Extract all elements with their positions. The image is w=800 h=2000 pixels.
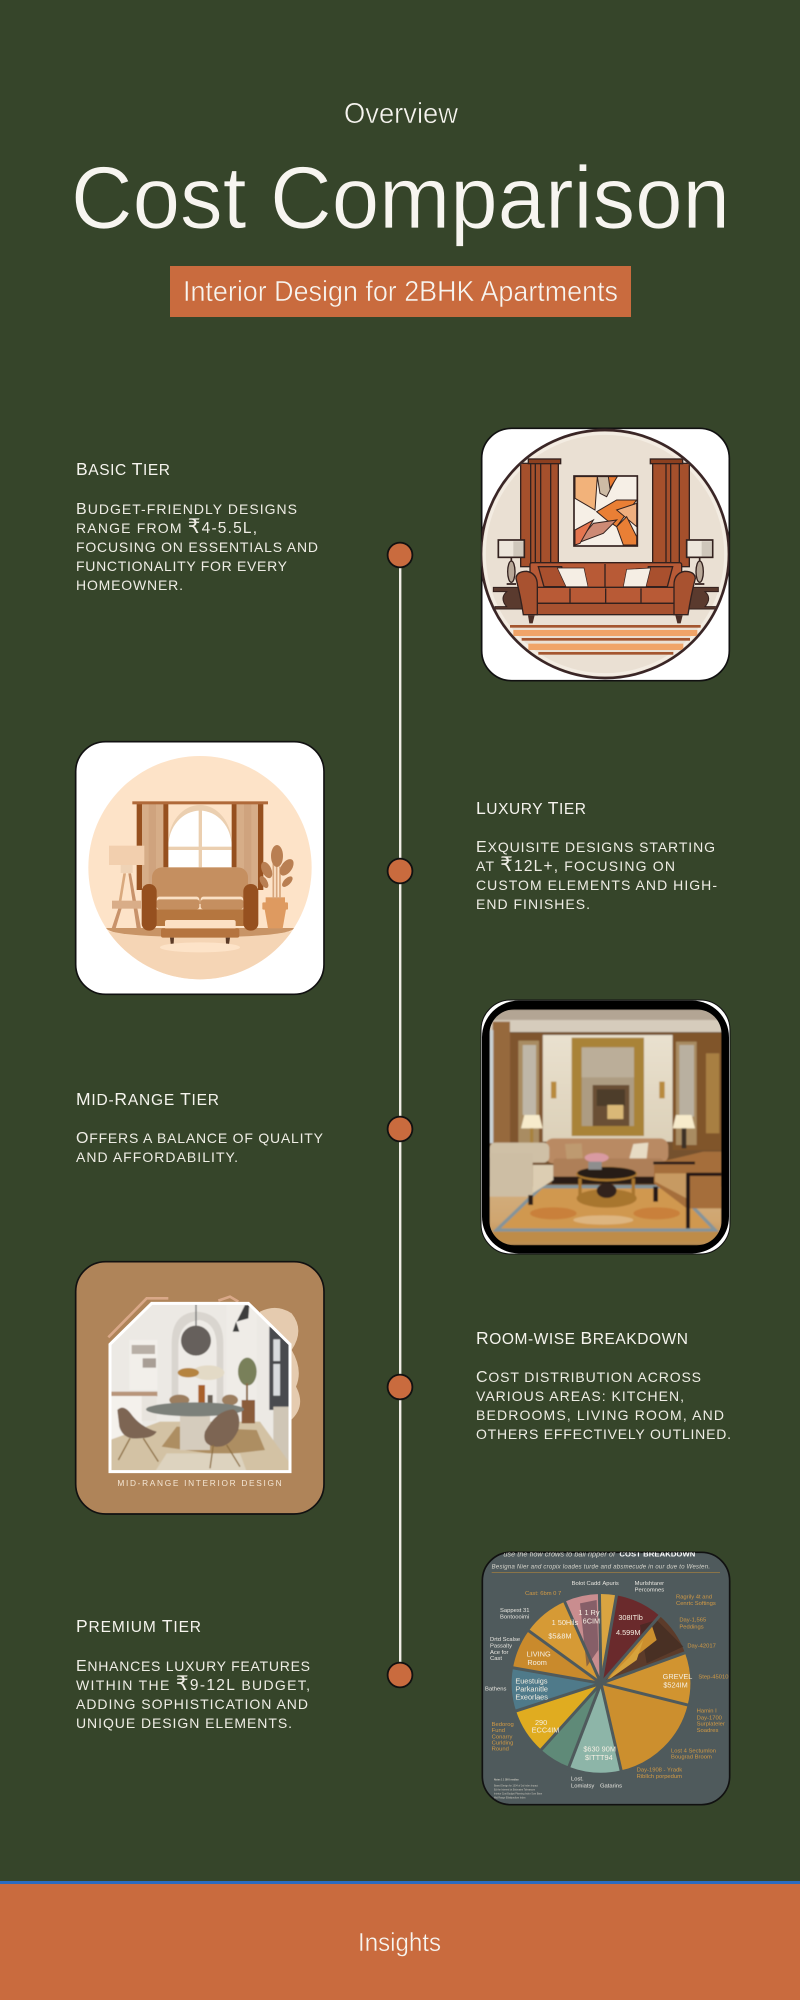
pie callouts: Day-1700 [697, 1715, 723, 1721]
body: luxury tier: EXQUISITE DESIGNS STARTING [476, 839, 715, 856]
pie slice labels: 308ITlb [618, 1613, 643, 1622]
lamps [498, 540, 713, 584]
pie callouts: Fund [492, 1728, 505, 1734]
timeline node: premium [388, 1663, 412, 1687]
photo caption: MID-RANGE INTERIOR DESIGN [117, 1478, 282, 1488]
shelves [129, 1340, 157, 1390]
wall lamp [237, 1305, 249, 1322]
pie callouts: Cast [490, 1656, 502, 1662]
pie slice labels: $5&8M [548, 1631, 572, 1640]
illustration: basic tier living room [481, 428, 729, 681]
timeline [388, 543, 412, 1687]
pie callouts: Bolot Cadd [572, 1581, 601, 1587]
text block: premium tier [76, 1616, 310, 1731]
body: basic tier: FOCUSING ON ESSENTIALS AND [76, 539, 318, 555]
lamps [521, 1115, 543, 1128]
pie callouts: Murlshtarer [635, 1581, 664, 1587]
pie callouts: Day-42017 [687, 1643, 716, 1649]
side tables [493, 587, 525, 609]
body: basic tier: FUNCTIONALITY FOR EVERY [76, 558, 288, 574]
flowers [585, 1153, 609, 1162]
pie callouts: Percomnes [635, 1588, 664, 1594]
pie callouts: Conarry [492, 1734, 512, 1740]
decorative outline [108, 1297, 238, 1337]
illustration: mid-range lounge [76, 742, 324, 994]
pie callouts: Bougrad Broom [671, 1755, 712, 1761]
rug and floor [489, 1187, 722, 1245]
window [168, 805, 232, 842]
chart heading: use the flow crows to ball ripper of [503, 1550, 616, 1559]
timeline node: mid-range [388, 1117, 412, 1141]
pie slice labels: GREVEL [663, 1672, 692, 1681]
body: room-wise breakdown: OTHERS EFFECTIVELY OUTLINED. [476, 1426, 731, 1442]
pie slice labels: LIVING [527, 1650, 551, 1659]
timeline node: luxury [388, 859, 412, 883]
pie slice labels: 1 50Hils [552, 1618, 578, 1627]
slice gaps [509, 1590, 692, 1774]
chart heading bold: COST BREAKDOWN [619, 1550, 696, 1559]
pie callouts: Lost 4 Sectumlon [671, 1749, 716, 1755]
pie callouts: Cenrtc Softings [676, 1601, 716, 1607]
pie slice labels: Exeorlaes [515, 1692, 548, 1701]
pie callouts: Sappest 31 [500, 1608, 529, 1614]
pie callouts: Curlding [492, 1740, 513, 1746]
sofa [152, 867, 248, 904]
coffee table [577, 1189, 637, 1208]
painting [574, 476, 637, 546]
heading: room-wise breakdown: ROOM-WISE BREAKDOWN [476, 1328, 688, 1348]
pie callouts: Bontoooimi [500, 1615, 529, 1621]
kitchen counter [111, 1392, 157, 1396]
rug stripes [510, 625, 701, 628]
pie slice details [580, 1600, 598, 1667]
text block: basic tier [76, 459, 318, 593]
pendant [195, 1303, 197, 1327]
text block: luxury tier [476, 798, 717, 912]
flowers and vase [192, 1365, 224, 1380]
chairs [117, 1408, 157, 1439]
gilded mirror [572, 1038, 644, 1136]
body: basic tier: RANGE FROM ₹4-5.5L, [76, 514, 257, 538]
coffee table [165, 920, 236, 929]
subtitle banner: Interior Design for 2BHK Apartments [183, 276, 618, 308]
ceiling [489, 1009, 722, 1021]
timeline node: room-wise [388, 1375, 412, 1399]
right armchair [654, 1152, 722, 1208]
heading: mid-range tier: MID-RANGE TIER [76, 1089, 219, 1109]
chart: cost breakdown pie thumbnail [482, 1550, 730, 1805]
body: premium tier: WITHIN THE ₹9-12L BUDGET, [76, 1671, 310, 1695]
body: basic tier: HOMEOWNER. [76, 577, 183, 593]
decorative blob [260, 1308, 300, 1421]
pie slice labels: Room [527, 1658, 547, 1667]
text block: room-wise breakdown [476, 1328, 731, 1442]
curtains [137, 804, 142, 890]
footnote: Interior Cost Budget Planning Index Sum Base [494, 1793, 543, 1796]
table top [146, 1402, 244, 1416]
heading: luxury tier: LUXURY TIER [476, 798, 586, 818]
sconces [551, 1082, 556, 1098]
text block: mid-range tier [76, 1089, 324, 1165]
body: room-wise breakdown: VARIOUS AREAS: KITCHEN, [476, 1388, 684, 1404]
pie slice labels: $ITTT94 [585, 1753, 613, 1762]
header [71, 98, 730, 317]
house-shaped photo [110, 1303, 290, 1472]
pie callouts: Ace for [490, 1650, 509, 1656]
body: luxury tier [476, 839, 717, 912]
pie callouts: Step-45010 [698, 1675, 729, 1681]
footnote: Notes 1 1 SKU median [494, 1779, 519, 1782]
window [269, 1327, 290, 1410]
pie callouts: Apuris [602, 1581, 619, 1587]
tufted sofa [545, 1138, 668, 1163]
pie slice labels: Euestuigs [515, 1676, 548, 1685]
photo: luxury interior [481, 1000, 730, 1254]
pie slice labels: 6CIM [583, 1616, 600, 1625]
footer band [0, 1881, 800, 2000]
body: mid-range tier: AND AFFORDABILITY. [76, 1149, 238, 1165]
pie callouts: Lomiatsy [571, 1783, 594, 1789]
subtitle banner [170, 266, 631, 317]
body: premium tier [76, 1658, 310, 1731]
pie slice labels [515, 1608, 692, 1762]
footnote [494, 1779, 543, 1800]
pie slice labels: $524IM [663, 1681, 688, 1690]
pie callouts: Surplateler [697, 1722, 725, 1728]
body: luxury tier: AT ₹12L+, FOCUSING ON [476, 852, 675, 876]
footer text: Insights: Insights [358, 1927, 441, 1957]
pie callouts: Peddings [679, 1624, 704, 1630]
pie slice labels: ECC4IM [532, 1726, 559, 1735]
plant [266, 897, 285, 903]
floor lamp [109, 846, 144, 865]
pie slices [538, 1620, 664, 1746]
plant [238, 1358, 257, 1386]
heading: basic tier: BASIC TIER [76, 459, 170, 479]
pie callouts: Bathens [485, 1687, 506, 1693]
heading: premium tier: PREMIUM TIER [76, 1616, 201, 1636]
body: room-wise breakdown: BEDROOMS, LIVING ROOM, AND [476, 1407, 724, 1423]
body: room-wise breakdown: COST DISTRIBUTION ACROSS [476, 1369, 701, 1386]
pie slice labels: 290 [535, 1718, 547, 1727]
pie callouts: Round [492, 1747, 509, 1753]
footnote: Ed the Interest lot Estimates Tolerances [494, 1789, 536, 1792]
footnote: Based Design for 1304 of 1st Index Impact [494, 1785, 538, 1788]
pie slice labels: $630 90M [583, 1745, 616, 1754]
left armchair [489, 1143, 549, 1163]
photo: room with dining table [76, 1262, 324, 1514]
pie callouts: Soadres [697, 1728, 718, 1734]
back chairs [169, 1395, 189, 1405]
pie slice labels: 1 1 Ry [578, 1608, 600, 1617]
curtains [521, 459, 689, 567]
body: mid-range tier: OFFERS A BALANCE OF QUALITY [76, 1130, 324, 1147]
pie callouts: Bedorog [492, 1722, 514, 1728]
pie callouts: Day-1,565 [679, 1618, 706, 1624]
title: Cost Comparison [71, 148, 730, 247]
body: premium tier: UNIQUE DESIGN ELEMENTS. [76, 1715, 292, 1731]
body: luxury tier: CUSTOM ELEMENTS AND HIGH- [476, 877, 717, 893]
sofa [516, 563, 695, 615]
pie callouts: Ribllch porpedum [637, 1774, 682, 1780]
timeline node: basic [388, 543, 412, 567]
footnote: Mid Range Elbalipedium Index [494, 1798, 526, 1800]
pie callouts: Lost. [571, 1777, 584, 1783]
pedestal [180, 1412, 210, 1450]
body: room-wise breakdown [476, 1369, 731, 1442]
pie callouts: Gatarins [600, 1783, 622, 1789]
body: premium tier: ADDING SOPHISTICATION AND [76, 1696, 308, 1712]
body: basic tier [76, 501, 318, 593]
pie slice labels: Parkanitle [515, 1685, 548, 1694]
body: premium tier: ENHANCES LUXURY FEATURES [76, 1658, 310, 1675]
pie slice labels: 4.599M [616, 1628, 640, 1637]
body: mid-range tier [76, 1130, 324, 1165]
floor band [106, 928, 294, 937]
pie callouts: Cast: 6bm 0 7 [525, 1591, 561, 1597]
chart subtitle: Besigna Nier and cropix loades turde and absmecude in our due to Westen. [492, 1564, 710, 1570]
pie callouts: Passalty [490, 1643, 512, 1649]
timeline line [399, 555, 401, 1675]
body: luxury tier: END FINISHES. [476, 896, 590, 912]
pie callouts: Ragrily 4t and [676, 1594, 712, 1600]
pie callouts [485, 1581, 729, 1789]
pie callouts: Day-1908 - Yradk [637, 1768, 682, 1774]
pie callouts: Drtd Scalse [490, 1637, 520, 1643]
wall panels [543, 1035, 673, 1142]
eyebrow: Overview: Overview [344, 98, 459, 130]
pie callouts: Hamin I [697, 1709, 717, 1715]
body: basic tier: BUDGET-FRIENDLY DESIGNS [76, 501, 297, 518]
floor [110, 1422, 290, 1472]
